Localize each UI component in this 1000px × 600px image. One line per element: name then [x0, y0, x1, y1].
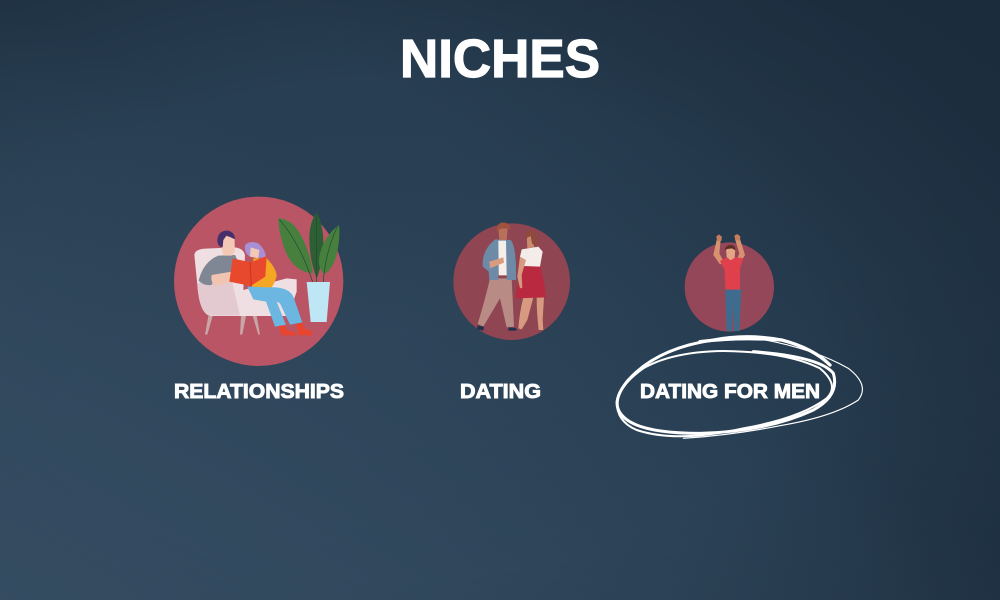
woman's skirt — [515, 265, 546, 298]
panel: dating — [453, 222, 570, 403]
panel: dating for men — [617, 234, 862, 438]
man's head — [498, 228, 508, 240]
plant — [278, 218, 313, 273]
woman's head — [527, 233, 534, 248]
panel: relationships — [174, 197, 344, 403]
hand-drawn circle — [617, 337, 862, 438]
man's head — [221, 235, 235, 256]
vase — [307, 282, 330, 322]
book — [229, 256, 267, 286]
icon: walking couple — [453, 222, 570, 340]
woman's legs — [518, 297, 544, 330]
title: NICHES — [400, 29, 600, 89]
arms — [713, 239, 745, 264]
armchair — [194, 247, 297, 316]
icon: couple reading in armchair — [174, 197, 343, 366]
man's legs — [478, 278, 514, 327]
man's torso — [199, 255, 240, 285]
legs — [725, 289, 741, 331]
man's jacket — [483, 239, 516, 280]
head — [726, 248, 735, 260]
woman's legs — [247, 287, 302, 327]
label: dating: DATING — [460, 381, 541, 403]
woman — [245, 242, 266, 258]
shirt — [720, 257, 743, 290]
icon: cheering man — [685, 234, 774, 332]
woman's top — [520, 247, 543, 267]
label: relationships: RELATIONSHIPS — [174, 381, 344, 403]
label: dating for men: DATING FOR MEN — [640, 381, 820, 403]
